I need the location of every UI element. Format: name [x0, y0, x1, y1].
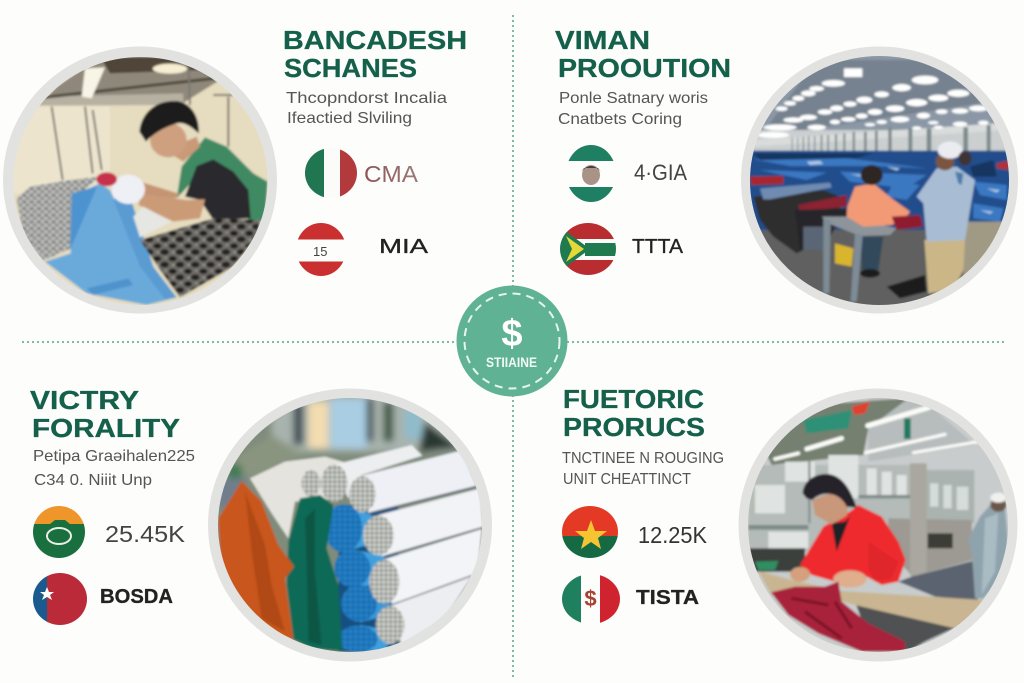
label: MIA: MIA [379, 236, 429, 258]
heading: VICTRY [30, 385, 139, 415]
icon: red white flag with 15: 15 [313, 244, 327, 259]
heading [555, 25, 731, 83]
label: 25.45K: 25.45K [105, 521, 186, 547]
heading [30, 385, 180, 443]
heading: PRORUCS [563, 412, 705, 442]
label: TISTA: TISTA [636, 587, 699, 609]
text block: Cnatbets Coring [558, 111, 682, 128]
heading: FORALITY [32, 413, 180, 443]
label: CMA: CMA [364, 161, 419, 187]
heading: BANCADESH [283, 25, 467, 55]
label: BOSDA: BOSDA [100, 586, 173, 608]
text block: Ifeactied Slviling [287, 110, 412, 127]
heading: SCHANES [284, 53, 417, 83]
photo: fabric rolls [205, 385, 495, 665]
panel: top left [0, 25, 467, 320]
icon: green red yellow flag [560, 223, 616, 275]
text block [562, 450, 724, 488]
heading [563, 384, 705, 442]
text block: UNIT CHEATTINCT [563, 471, 691, 488]
text block [33, 448, 195, 489]
badge label: STIIAINE [486, 354, 537, 370]
photo: factory floor with blue garments [740, 40, 1024, 320]
panel: bottom right [562, 384, 1024, 665]
icon: green white flag with portrait [568, 145, 614, 202]
photo: worker in red jacket at table [735, 385, 1024, 665]
text block [286, 90, 447, 127]
icon: orange green flag [33, 506, 85, 558]
icon: green white red flag with dollar [562, 574, 621, 624]
vertical dotted divider [512, 15, 514, 680]
center badge [456, 286, 568, 396]
icon: green white red flag with dollar: $ [584, 586, 597, 611]
heading: VIMAN [555, 25, 650, 55]
icon: red green flag with star [562, 506, 618, 558]
panel: bottom left [30, 385, 495, 665]
text block: C34 0. Niiit Unp [34, 472, 152, 489]
heading: PROOUTION [558, 53, 731, 83]
panel: top right [555, 25, 1024, 320]
text block: TNCTINEE N ROUGING [562, 450, 724, 467]
heading [283, 25, 467, 83]
text block [558, 90, 708, 128]
text block: Ponle Satnary woris [559, 90, 708, 107]
text block: Thcopndorst Incalia [286, 90, 447, 107]
photo: worker handling blue fabric [0, 40, 280, 320]
label: TTTA: TTTA [632, 236, 684, 258]
horizontal dotted divider [22, 341, 1005, 343]
icon: dollar sign: $ [501, 313, 523, 355]
label: 12.25K: 12.25K [638, 522, 708, 548]
heading: FUETORIC [563, 384, 704, 414]
icon: green white red flag [305, 148, 358, 198]
icon: red white flag with 15 [296, 223, 346, 276]
label: 4-GIA: 4·GIA [634, 160, 687, 185]
text block: Petipa Graəihalen225 [33, 448, 195, 465]
icon: blue red flag with star [33, 573, 87, 625]
